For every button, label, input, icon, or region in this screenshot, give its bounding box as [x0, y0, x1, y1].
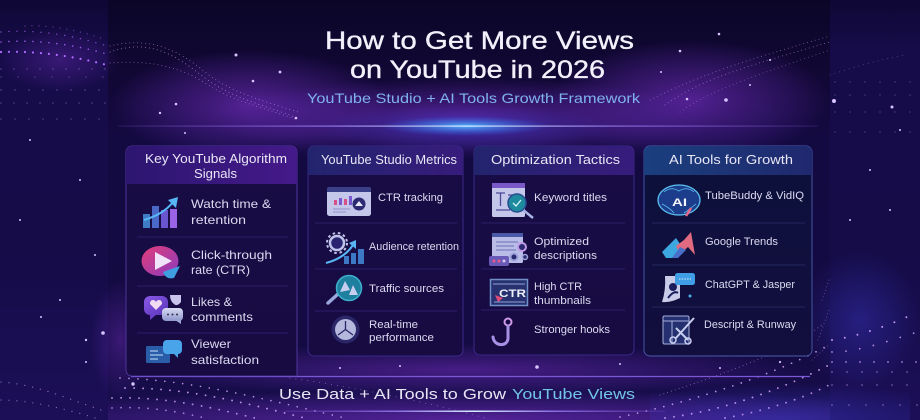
icon: CTR thumbnail: CTR: [499, 288, 526, 300]
footer glow line: [285, 410, 665, 412]
lower waves: [1, 280, 918, 418]
icon: hook: [493, 318, 512, 345]
panel: optimization tactics: [474, 146, 634, 355]
upper left side waves: [1, 26, 107, 65]
icon: gear and growth: [326, 233, 364, 264]
item text: Traffic sources: [369, 283, 444, 295]
outer frame: [131, 376, 810, 378]
icon: feedback bubbles: [146, 340, 182, 363]
item text: Audience retention: [369, 241, 459, 253]
panel header: AI Tools for Growth: [669, 152, 793, 167]
item text: [191, 248, 272, 277]
icon: dashboard: [327, 187, 371, 216]
item text: Watch time &: [191, 197, 271, 211]
icon: magnifier: [328, 276, 362, 303]
icon: AI brain: [658, 185, 700, 216]
icon: description settings: [489, 233, 528, 266]
icon: chat assistant: [662, 273, 695, 302]
item text: Real-time: [369, 319, 418, 331]
item text: [534, 236, 597, 262]
icon: CTR thumbnail: [490, 280, 528, 306]
panel header: [308, 146, 463, 175]
item text: descriptions: [534, 250, 597, 262]
title: [325, 27, 634, 84]
icon: likes and comments: [144, 295, 183, 324]
item text: Google Trends: [705, 236, 778, 248]
item text: ChatGPT & Jasper: [705, 279, 795, 291]
item text: [369, 319, 434, 344]
icon: play bubble: [142, 246, 180, 278]
item text: rate (CTR): [191, 263, 250, 277]
item text: Keyword titles: [534, 192, 607, 204]
title: on YouTube in 2026: [350, 56, 605, 84]
icon: rising bars: [143, 197, 178, 228]
icon: video editor: [663, 316, 694, 344]
item text: retention: [191, 213, 246, 227]
item text: Click-through: [191, 248, 272, 262]
subtitle: YouTube Studio + AI Tools Growth Framework: [307, 90, 641, 106]
upper wave in centre: [110, 36, 905, 120]
panel: key algorithm signals: [126, 146, 297, 376]
panel header: [474, 146, 634, 175]
panel header: Key YouTube Algorithm: [145, 151, 287, 166]
item text: comments: [191, 310, 253, 324]
item text: TubeBuddy & VidIQ: [705, 190, 804, 202]
item text: [191, 197, 271, 227]
icon: keyword search: [492, 183, 533, 218]
panel header: Optimization Tactics: [491, 152, 621, 167]
item text: Likes &: [191, 295, 232, 309]
glowing divider: [118, 116, 818, 136]
panel header: Signals: [194, 166, 238, 181]
panel: studio metrics: [308, 146, 463, 356]
item text: [534, 281, 591, 307]
item text: Stronger hooks: [534, 324, 610, 336]
panel header: YouTube Studio Metrics: [321, 152, 457, 167]
item text: satisfaction: [191, 353, 259, 367]
item text: performance: [369, 332, 434, 344]
item text: Optimized: [534, 236, 589, 248]
icon: trend arrow: [662, 232, 695, 258]
item text: [191, 295, 253, 324]
footer tagline: Use Data + AI Tools to Grow: [279, 386, 511, 403]
footer tagline: YouTube Views: [512, 386, 635, 403]
item text: thumbnails: [534, 295, 591, 307]
item text: [191, 337, 259, 367]
panel: AI tools: [644, 146, 812, 356]
item text: High CTR: [534, 281, 582, 293]
item text: CTR tracking: [378, 192, 443, 204]
icon: AI brain: AI: [672, 197, 687, 209]
title: How to Get More Views: [325, 27, 634, 55]
panel header: [126, 146, 297, 184]
item text: Descript & Runway: [704, 319, 796, 331]
icon: clock: [332, 316, 360, 344]
panel header: [644, 146, 812, 175]
item text: Viewer: [191, 337, 231, 351]
